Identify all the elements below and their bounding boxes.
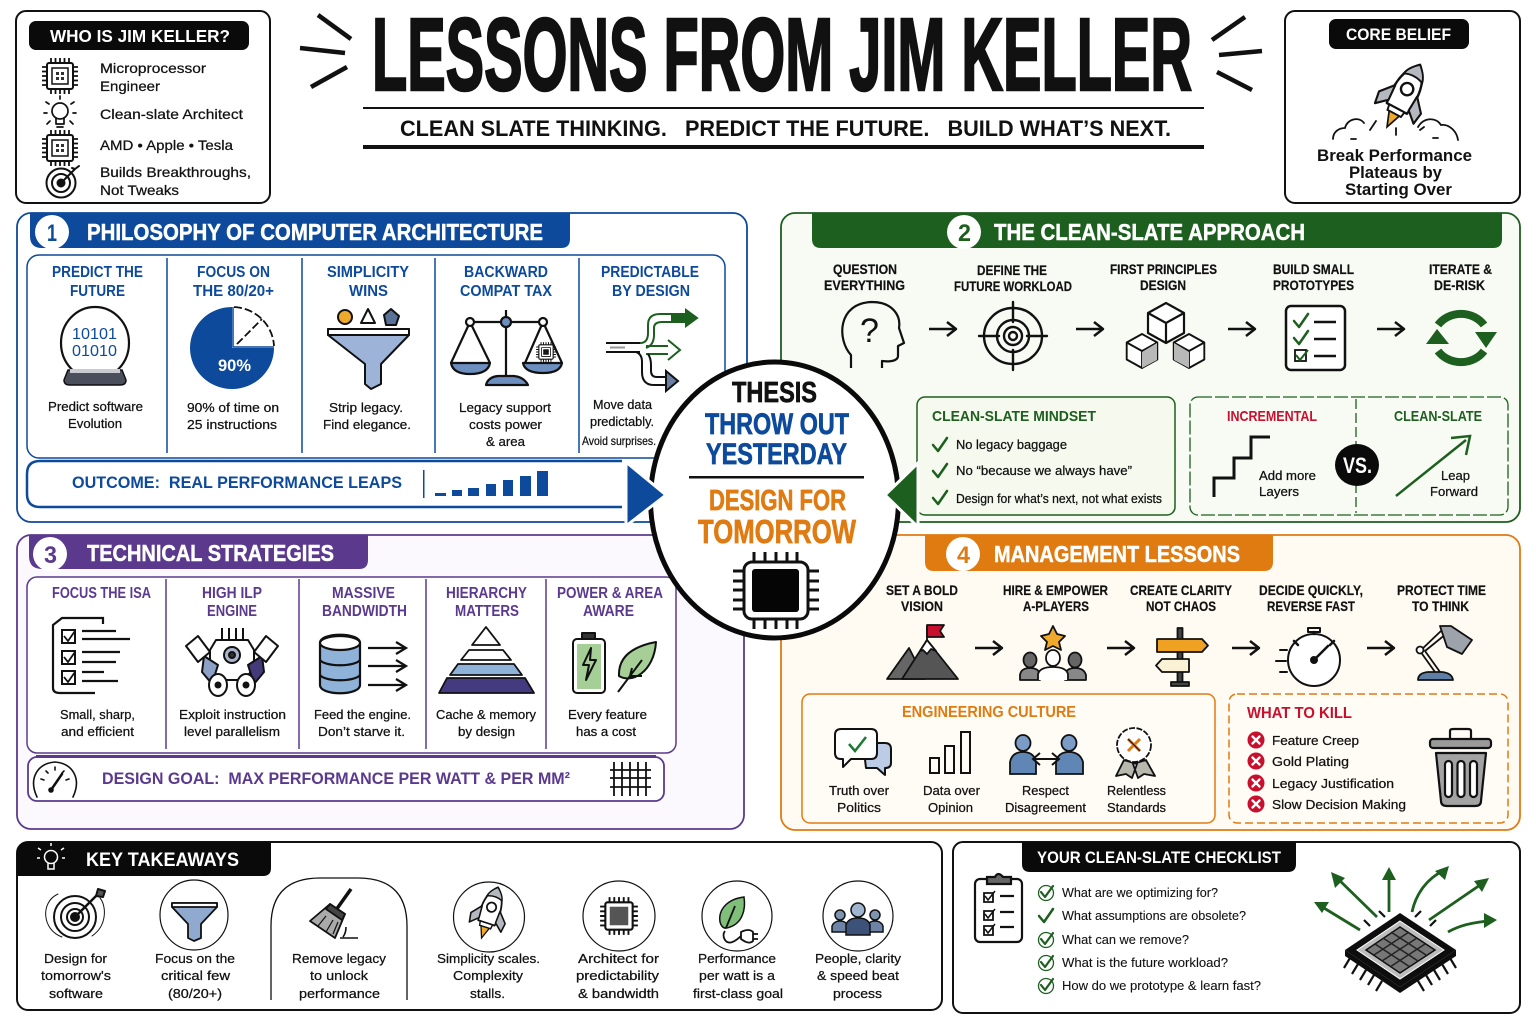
column: focus the ISA [52, 585, 151, 739]
heading: checklist: YOUR CLEAN-SLATE CHECKLIST [1037, 849, 1281, 867]
text: predict software evolution [48, 399, 143, 431]
arrow [1367, 641, 1394, 655]
panel: clean-slate mindset: Design for what’s next, not what exists [956, 491, 1162, 506]
heading: technical strategies: TECHNICAL STRATEGIES [87, 540, 334, 566]
arrow [1377, 322, 1404, 336]
panel: clean-slate mindset: CLEAN-SLATE MINDSET [932, 408, 1096, 425]
icon: clipboard [975, 874, 1022, 942]
icon: rocket launch [1333, 54, 1458, 140]
step: build small prototypes: PROTOTYPES [1273, 277, 1354, 293]
takeaway: focus on critical few: (80/20+) [168, 986, 222, 1001]
column: focus on 80/20: FOCUS ON [197, 264, 270, 281]
text: builds breakthroughs: Not Tweaks [100, 182, 179, 198]
takeaway: design for tomorrow: tomorrow's [41, 968, 112, 983]
heading: checklist [1022, 842, 1296, 872]
text: small sharp [60, 707, 135, 739]
icon: processor chip [733, 552, 819, 629]
takeaway: simplicity scales: stalls. [470, 986, 505, 1001]
text: clean-slate architect: Clean-slate Architect [100, 106, 243, 122]
item: respect disagreement: Disagreement [1005, 800, 1086, 815]
text: feed the engine: Don’t starve it. [318, 724, 405, 739]
step: hire and empower: A-PLAYERS [1023, 598, 1089, 614]
panel: 2 the clean-slate approach [781, 213, 1520, 522]
arrow [1228, 322, 1255, 336]
icon: vs badge: VS. [1343, 453, 1372, 478]
panel: 3 technical strategies [17, 535, 744, 829]
column: hierarchy matters [436, 585, 536, 739]
panel: incremental vs clean-slate: INCREMENTAL [1227, 408, 1317, 425]
heading: clean-slate approach: 2 [958, 220, 971, 247]
heading: philosophy: PHILOSOPHY OF COMPUTER ARCHITECTURE [87, 219, 543, 245]
heading: management lessons: 4 [957, 542, 971, 569]
icon: team star [1020, 626, 1086, 680]
column: predict the future: FUTURE [70, 283, 125, 300]
item: respect disagreement [1005, 735, 1086, 815]
panel: incremental vs clean-slate: Leap [1441, 468, 1470, 483]
takeaway: design for tomorrow: software [49, 986, 103, 1001]
step: build small prototypes [1273, 261, 1354, 370]
checklist items: What can we remove? [1062, 933, 1189, 947]
step: question everything: QUESTION [833, 261, 897, 277]
icon: engine [186, 628, 278, 696]
step: question everything [824, 261, 905, 368]
text: move data predictably: Move data [593, 397, 653, 412]
text: strip legacy [323, 400, 411, 432]
panel: clean-slate mindset: No legacy baggage [956, 437, 1067, 452]
text: exploit instruction: level parallelism [184, 724, 280, 739]
text: throw out yesterday [705, 408, 849, 471]
takeaway: performance per watt: per watt is a [699, 968, 776, 983]
text: microprocessor engineer: Engineer [100, 78, 160, 94]
panel: incremental vs clean-slate [1190, 397, 1508, 515]
column: focus on 80/20 [187, 264, 279, 432]
column: high ILP engine: ENGINE [207, 603, 257, 620]
icon: ISA list [53, 618, 130, 693]
text: break performance plateaus [1317, 147, 1472, 199]
panel: clean-slate mindset: No “because we always have” [956, 463, 1132, 478]
arrow: green into thesis [885, 463, 918, 527]
heading: who is Jim Keller: WHO IS JIM KELLER? [50, 26, 230, 46]
icon: gauge [34, 762, 76, 797]
step: decide quickly [1259, 582, 1363, 686]
step: iterate and de-risk: ITERATE & [1429, 261, 1492, 277]
column: massive bandwidth: BANDWIDTH [322, 603, 407, 620]
text: 90 percent of time: 90% of time on [187, 400, 279, 415]
step: question everything: EVERYTHING [824, 277, 905, 293]
column: backward compat tax [451, 264, 562, 449]
heading: key takeaways: KEY TAKEAWAYS [86, 850, 239, 871]
icon: crystal ball: 10101 [72, 326, 117, 343]
text: 90 percent of time: 25 instructions [187, 417, 278, 432]
step: define the future workload: DEFINE THE [977, 262, 1047, 278]
text: 90 percent of time [187, 400, 279, 432]
icon: chip with radiating arrows [1314, 866, 1497, 993]
text: cache and memory: Cache & memory [436, 707, 536, 722]
takeaway: architect for predictability: predictability [576, 968, 660, 983]
takeaway: architect for predictability: Architect for [578, 951, 660, 966]
text: microprocessor engineer: Microprocessor [100, 60, 206, 76]
panel: incremental vs clean-slate: Layers [1259, 484, 1299, 499]
takeaway: remove legacy [271, 878, 407, 1001]
checklist items: What is the future workload? [1062, 956, 1228, 970]
text: exploit instruction: Exploit instruction [179, 707, 286, 722]
text: break performance plateaus: Plateaus by [1349, 164, 1443, 182]
text: break performance plateaus: Break Performance [1317, 147, 1472, 165]
panel: what to kill: Gold Plating [1272, 754, 1349, 769]
item: respect disagreement: Respect [1022, 783, 1069, 798]
takeaway: focus on critical few: Focus on the [155, 951, 235, 966]
text: every feature: has a cost [576, 724, 636, 739]
icon: stopwatch [1276, 628, 1340, 686]
takeaway: focus on critical few [155, 880, 235, 1001]
text: builds breakthroughs [100, 164, 251, 198]
takeaway: focus on critical few: critical few [161, 968, 231, 983]
text: predict software evolution: Evolution [68, 416, 122, 431]
text: every feature: Every feature [568, 707, 647, 722]
arrow [929, 322, 956, 336]
column: power and area: AWARE [583, 603, 634, 620]
icon: light bulb [44, 96, 76, 127]
checklist items: What are we optimizing for? [1062, 886, 1218, 900]
takeaway: simplicity scales: Simplicity scales. [437, 951, 540, 966]
panel: 4 management lessons [781, 535, 1520, 830]
text: companies: AMD • Apple • Tesla [100, 137, 233, 153]
icon: cycle arrows [1426, 314, 1497, 362]
column: backward compat tax: COMPAT TAX [460, 283, 553, 300]
icon: head with question mark: ? [860, 312, 879, 350]
takeaway: simplicity scales: Complexity [453, 968, 524, 983]
icon: vs badge [1335, 444, 1379, 486]
panel: who is Jim Keller [16, 11, 270, 203]
checklist items: What assumptions are obsolete? [1062, 909, 1246, 923]
item: data over opinion [923, 732, 981, 815]
text: design for tomorrow: DESIGN FOR [709, 485, 846, 517]
column: high ILP engine: HIGH ILP [202, 585, 262, 602]
text: small sharp: Small, sharp, [60, 707, 135, 722]
panel: your clean-slate checklist [953, 842, 1520, 1013]
text: builds breakthroughs: Builds Breakthroughs, [100, 164, 251, 180]
icon: cubes [1127, 303, 1204, 368]
text: break performance plateaus: Starting Over [1345, 181, 1453, 199]
panel: engineering culture [802, 694, 1215, 823]
step: first principles design: FIRST PRINCIPLES [1110, 261, 1217, 277]
text: predict software evolution: Predict software [48, 399, 143, 414]
text: design for tomorrow [698, 485, 857, 550]
icon: processor [42, 58, 78, 94]
icon: checklist [1286, 306, 1345, 370]
item: data over opinion: Opinion [928, 800, 973, 815]
panel: what to kill: Feature Creep [1272, 733, 1359, 748]
panel: incremental vs clean-slate: Forward [1430, 484, 1478, 499]
icon: signpost [1156, 628, 1208, 686]
step: build small prototypes: BUILD SMALL [1273, 261, 1354, 277]
column: simplicity wins [323, 264, 411, 432]
heading: philosophy [30, 213, 570, 249]
takeaway: remove legacy: Remove legacy [292, 951, 387, 966]
step: define the future workload [954, 262, 1072, 370]
icon: desk lamp [1416, 626, 1472, 680]
icon: data flow arrows [606, 310, 697, 391]
panel: key takeaways [17, 842, 942, 1010]
icon: battery and leaf [573, 633, 656, 693]
step: set a bold vision: SET A BOLD [886, 582, 958, 598]
item: truth over politics: Politics [837, 800, 882, 815]
column: predictable by design: BY DESIGN [612, 283, 690, 300]
arrow [975, 641, 1002, 655]
panel: engineering culture: ENGINEERING CULTURE [902, 704, 1076, 721]
text: design for tomorrow: TOMORROW [698, 513, 857, 550]
item: data over opinion: Data over [923, 783, 981, 798]
step: create clarity: CREATE CLARITY [1130, 582, 1233, 598]
heading: philosophy: 1 [47, 220, 57, 247]
text: move data predictably [582, 397, 656, 448]
text: move data predictably: predictably. [590, 414, 654, 429]
heading: clean-slate approach: THE CLEAN-SLATE APPROACH [994, 219, 1305, 245]
heading: clean-slate approach [812, 213, 1502, 249]
takeaway: architect for predictability [576, 881, 660, 1001]
text: strip legacy: Find elegance. [323, 417, 411, 432]
panel: 1 philosophy of computer architecture [17, 213, 747, 522]
column: massive bandwidth [314, 585, 411, 739]
takeaway: performance per watt [693, 881, 783, 1001]
subtitle: CLEAN SLATE THINKING. PREDICT THE FUTURE. BUILD WHAT’S NEXT. [400, 116, 1171, 141]
step: iterate and de-risk: DE-RISK [1434, 277, 1485, 293]
takeaway: remove legacy: to unlock [310, 968, 369, 983]
icon: trash can [1430, 729, 1491, 806]
step: first principles design: DESIGN [1140, 277, 1186, 293]
column: hierarchy matters: MATTERS [455, 603, 519, 620]
text: cache and memory: by design [458, 724, 515, 739]
column: hierarchy matters: HIERARCHY [446, 585, 528, 602]
step: protect time: TO THINK [1412, 598, 1469, 614]
icon: crystal ball [61, 307, 129, 385]
step: decide quickly: REVERSE FAST [1267, 598, 1355, 614]
column: predictable by design [582, 264, 699, 448]
step: protect time [1397, 582, 1486, 680]
text: microprocessor engineer [100, 60, 206, 94]
column: high ILP engine [179, 585, 286, 739]
panel: what to kill: WHAT TO KILL [1247, 705, 1352, 722]
step: create clarity [1130, 582, 1233, 686]
takeaway: people clarity speed: process [833, 986, 883, 1001]
column: backward compat tax: BACKWARD [464, 264, 548, 281]
step: decide quickly: DECIDE QUICKLY, [1259, 582, 1363, 598]
takeaway: simplicity scales [437, 882, 540, 1001]
icon: target crosshair [979, 302, 1047, 370]
item: relentless standards: Standards [1107, 800, 1166, 815]
checklist items [1038, 886, 1261, 994]
item: relentless standards [1107, 728, 1166, 815]
column: predict the future [48, 264, 143, 431]
text: feed the engine: Feed the engine. [314, 707, 411, 722]
panel: incremental vs clean-slate: Add more [1259, 468, 1316, 483]
text: throw out yesterday: YESTERDAY [706, 438, 847, 471]
column: power and area: POWER & AREA [557, 585, 663, 602]
arrow [1107, 641, 1134, 655]
outcome bar: OUTCOME: REAL PERFORMANCE LEAPS [72, 474, 402, 492]
column: power and area [557, 585, 663, 739]
heading: core belief: CORE BELIEF [1346, 25, 1451, 44]
heading: technical strategies [29, 535, 368, 571]
step: define the future workload: FUTURE WORKLOAD [954, 278, 1072, 294]
step: hire and empower [1003, 582, 1108, 680]
panel: what to kill: Slow Decision Making [1272, 797, 1406, 812]
panel: clean-slate mindset [917, 397, 1175, 515]
text: throw out yesterday: THROW OUT [705, 408, 849, 441]
text: feed the engine [314, 707, 411, 739]
text: strip legacy: Strip legacy. [329, 400, 403, 415]
step: protect time: PROTECT TIME [1397, 582, 1486, 598]
panel: what to kill: Legacy Justification [1272, 776, 1394, 791]
takeaway: performance per watt: first-class goal [693, 986, 783, 1001]
step: set a bold vision: VISION [901, 598, 943, 614]
step: first principles design [1110, 261, 1217, 368]
text: exploit instruction [179, 707, 286, 739]
heading: key takeaways [17, 842, 271, 876]
text: thesis: THESIS [732, 377, 817, 409]
takeaway: people clarity speed [815, 881, 902, 1001]
step: hire and empower: HIRE & EMPOWER [1003, 582, 1108, 598]
heading: core belief [1329, 19, 1469, 49]
column: predictable by design: PREDICTABLE [601, 264, 699, 281]
chart: 90 percent pie [190, 307, 274, 389]
step: set a bold vision [886, 582, 958, 679]
takeaway: design for tomorrow: Design for [44, 951, 108, 966]
icon: leap arrow [1396, 436, 1470, 496]
heading: who is Jim Keller [29, 21, 249, 50]
chart: rising bars [435, 471, 548, 496]
icon: stairs [1214, 437, 1270, 497]
arrow [1076, 322, 1103, 336]
text: legacy support: Legacy support [459, 400, 551, 415]
text: every feature [568, 707, 647, 739]
arrow: blue into thesis [626, 462, 666, 526]
icon: balance scales [451, 310, 562, 385]
icon: target [46, 166, 79, 198]
text: cache and memory [436, 707, 536, 739]
subtitle [363, 107, 1204, 149]
step: iterate and de-risk [1426, 261, 1497, 362]
icon: mountain flag [887, 625, 958, 679]
column: massive bandwidth: MASSIVE [332, 585, 395, 602]
item: truth over politics: Truth over [829, 783, 890, 798]
text: move data predictably: Avoid surprises. [582, 434, 656, 448]
column: focus the ISA: FOCUS THE ISA [52, 585, 151, 602]
checklist items: How do we prototype & learn fast? [1062, 979, 1261, 993]
chart: 90 percent pie: 90% [218, 356, 251, 375]
column: predict the future: PREDICT THE [52, 264, 143, 281]
column: simplicity wins: WINS [349, 283, 388, 300]
takeaway: architect for predictability: & bandwidth [578, 986, 659, 1001]
panel: incremental vs clean-slate: CLEAN-SLATE [1394, 408, 1482, 425]
takeaway: design for tomorrow [41, 889, 112, 1001]
heading: technical strategies: 3 [44, 542, 57, 569]
arrow [1232, 641, 1259, 655]
icon: funnel [328, 309, 409, 389]
text: small sharp: and efficient [61, 724, 134, 739]
design goal bar: DESIGN GOAL: MAX PERFORMANCE PER WATT & PER MM² [102, 769, 570, 788]
icon: database with arrows [320, 635, 406, 693]
outcome bar [27, 461, 622, 507]
panel: what to kill [1229, 694, 1508, 823]
column: simplicity wins: SIMPLICITY [327, 264, 410, 281]
icon: memory pyramid [439, 627, 534, 693]
heading: management lessons [925, 535, 1273, 571]
heading: management lessons: MANAGEMENT LESSONS [994, 541, 1240, 567]
item: truth over politics [829, 729, 891, 815]
panel: core belief [1285, 11, 1520, 203]
step: create clarity: NOT CHAOS [1146, 598, 1216, 614]
item: relentless standards: Relentless [1107, 783, 1166, 798]
thesis circle [626, 362, 918, 638]
icon: silicon grid [610, 762, 651, 796]
takeaway: people clarity speed: People, clarity [815, 951, 902, 966]
takeaway: people clarity speed: & speed beat [817, 968, 899, 983]
icon: chip [42, 130, 78, 166]
takeaway: performance per watt: Performance [698, 951, 776, 966]
text: legacy support [459, 400, 551, 449]
text: legacy support: costs power [469, 417, 543, 432]
takeaway: remove legacy: performance [299, 986, 380, 1001]
text: legacy support: & area [486, 434, 526, 449]
column: focus on 80/20: THE 80/20+ [193, 283, 274, 300]
icon: crystal ball: 01010 [72, 343, 117, 360]
design goal bar [28, 756, 664, 801]
